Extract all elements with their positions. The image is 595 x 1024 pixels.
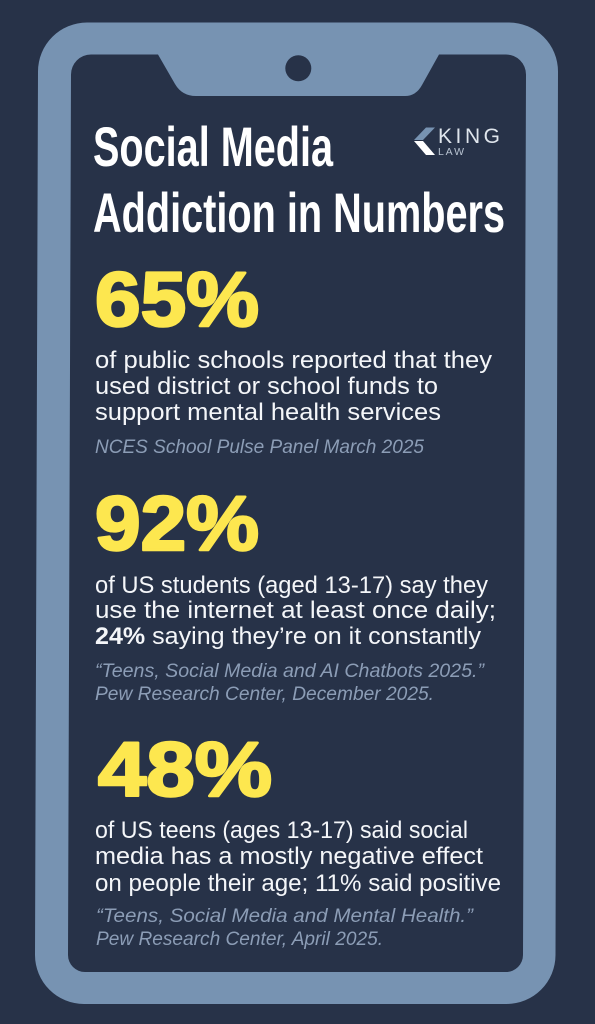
title: Social Media <box>93 115 334 178</box>
statistic: 92%: 92% <box>95 481 259 567</box>
source: Pew Chatbots: Pew Research Center, December 2025. <box>95 683 434 705</box>
description: negative effect <box>95 817 501 897</box>
logo: King Law: LAW <box>438 146 464 158</box>
description: school funds: support mental health services <box>95 399 441 426</box>
icon: phone camera <box>285 55 311 81</box>
description: negative effect: media has a mostly negative effect <box>95 843 483 870</box>
source: NCES: NCES School Pulse Panel March 2025 <box>95 436 424 458</box>
source: Pew Mental Health: “Teens, Social Media and Mental Health.” <box>96 905 475 927</box>
description: negative effect: on people their age; 11% said positive <box>95 870 501 897</box>
description: internet use: of US students (aged 13-17) say they <box>95 572 489 599</box>
description: school funds: used district or school funds to <box>95 373 438 400</box>
source: Pew Mental Health: Pew Research Center, April 2025. <box>96 928 383 950</box>
logo: King Law: KING <box>438 125 500 148</box>
statistic: 65%: 65% <box>95 257 259 343</box>
stat block: 92% <box>95 481 496 705</box>
source: Pew Chatbots <box>95 660 486 705</box>
description: negative effect: of US teens (ages 13-17) said social <box>95 817 468 844</box>
source: Pew Mental Health <box>96 905 475 950</box>
title <box>93 115 505 244</box>
description: internet use <box>95 572 496 650</box>
statistic: 48%: 48% <box>98 727 272 813</box>
description: school funds: of public schools reported that they <box>95 347 493 374</box>
source: Pew Chatbots: “Teens, Social Media and AI Chatbots 2025.” <box>95 660 486 682</box>
stat block: 48% <box>95 727 501 950</box>
logo: King Law <box>414 125 500 158</box>
stat block: 65% <box>95 257 493 458</box>
description: internet use: 24% saying they’re on it constantly <box>95 623 482 650</box>
description: school funds <box>95 347 493 426</box>
description: internet use: use the internet at least once daily; <box>95 597 496 624</box>
